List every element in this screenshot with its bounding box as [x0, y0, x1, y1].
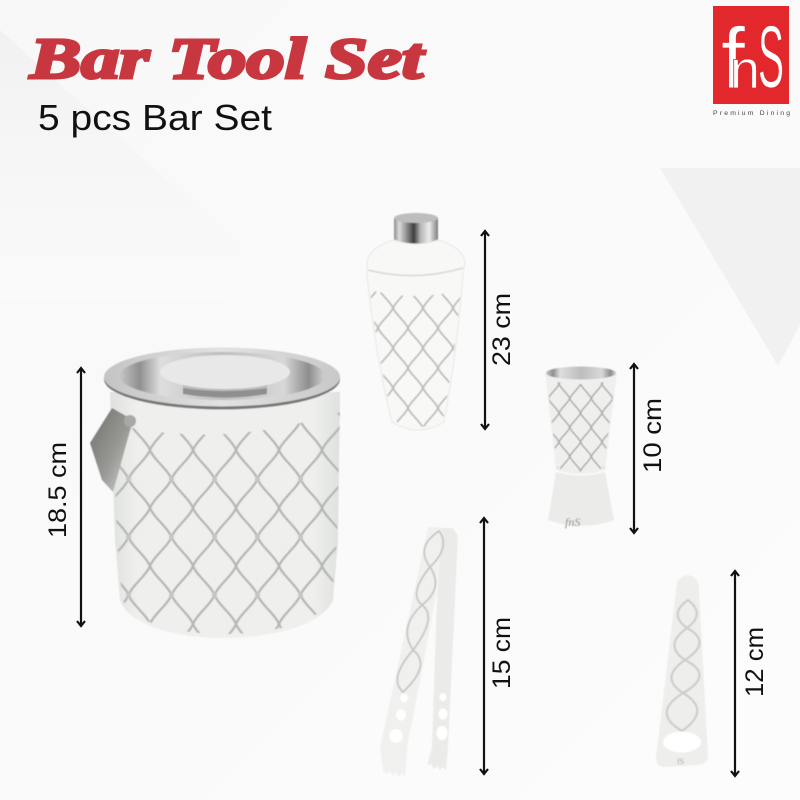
shaker seam — [368, 268, 463, 276]
label: 12 cm: 12 cm — [741, 627, 769, 697]
jigger — [545, 366, 617, 529]
jigger opening — [546, 366, 616, 380]
ice bucket — [90, 348, 340, 638]
bucket lattice pattern — [113, 412, 340, 634]
bucket lid — [160, 355, 290, 389]
tongs lattice — [397, 531, 443, 692]
label: 23 cm: 23 cm — [488, 293, 516, 366]
arrow: jigger height — [630, 364, 638, 533]
logo letters: f — [721, 11, 746, 107]
arrow: tongs length — [480, 518, 488, 774]
bucket rim — [104, 348, 340, 410]
tongs — [380, 527, 458, 777]
bucket lid stem — [183, 382, 267, 398]
shaker cap — [394, 213, 438, 244]
arrow: spoon length — [731, 571, 739, 776]
label: 10 cm: 10 cm — [639, 398, 667, 473]
shaker lattice — [370, 290, 461, 427]
jigger mark: fnS — [565, 515, 580, 529]
tongs right arm — [427, 528, 458, 771]
tongs left arm — [380, 527, 441, 777]
arrow: bucket height — [77, 368, 85, 626]
logo red square — [713, 6, 789, 104]
bucket handle — [90, 408, 136, 492]
label: 15 cm: 15 cm — [488, 617, 516, 689]
subtitle: 5 pcs Bar Set — [38, 97, 272, 138]
spoon mark: fS — [677, 757, 684, 766]
shaker body — [367, 240, 465, 430]
cocktail shaker — [367, 213, 465, 430]
logo letters: n — [730, 40, 760, 100]
spoon blade — [656, 575, 708, 767]
logo letters — [721, 7, 784, 107]
bucket interior — [119, 352, 325, 400]
logo — [713, 6, 790, 117]
jigger upper cup — [545, 372, 617, 474]
spoon lattice — [667, 600, 700, 731]
arrow: shaker height — [481, 231, 489, 429]
spoon hole — [663, 732, 701, 752]
jigger lattice — [547, 380, 615, 472]
tongs holes — [390, 693, 448, 743]
strainer spoon — [656, 575, 708, 767]
logo tagline: Premium Dining — [713, 110, 790, 117]
title: Bar Tool Set — [29, 26, 425, 91]
bucket body — [110, 392, 340, 638]
jigger lower cup — [548, 472, 614, 526]
label: 18.5 cm: 18.5 cm — [44, 442, 72, 538]
